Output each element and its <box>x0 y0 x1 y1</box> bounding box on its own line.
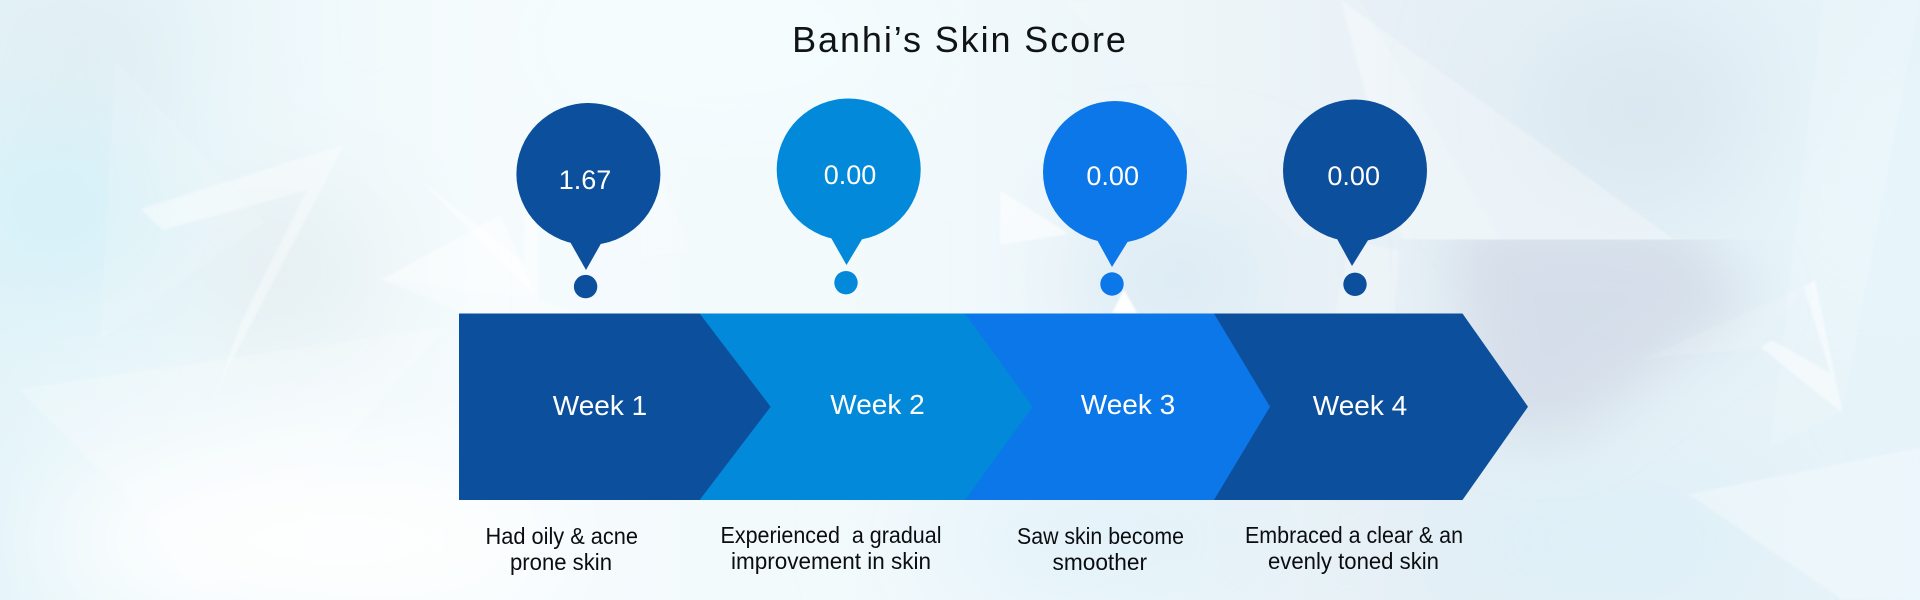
score bubble: week 3 <box>1043 101 1187 296</box>
score bubble: week 1 <box>516 103 660 298</box>
caption: week 2: Experienced a gradual <box>720 522 942 548</box>
week 3 chevron <box>960 314 1270 500</box>
week 4 chevron: Week 4 <box>1313 390 1407 421</box>
score bubble: week 4: 0.00 <box>1327 161 1380 191</box>
caption: week 1 <box>486 523 638 575</box>
week 4 chevron <box>1170 314 1528 500</box>
caption: week 4: evenly toned skin <box>1268 548 1439 574</box>
week 2 chevron: Week 2 <box>830 389 925 420</box>
caption: week 1: Had oily & acne <box>486 523 638 549</box>
week 1 chevron <box>459 314 771 500</box>
score bubble: week 2 <box>777 98 921 294</box>
score bubble: week 3: 0.00 <box>1086 161 1139 191</box>
caption: week 4: Embraced a clear & an <box>1245 522 1463 548</box>
caption: week 3: Saw skin become <box>1017 523 1184 549</box>
caption: week 2: improvement in skin <box>731 548 931 574</box>
week 2 chevron <box>695 314 1033 500</box>
week 1 chevron: Week 1 <box>553 390 647 421</box>
title: Banhi’s Skin Score <box>792 19 1128 60</box>
week 3 chevron: Week 3 <box>1081 389 1175 420</box>
caption: week 3 <box>1017 523 1184 575</box>
timeline arrow bar <box>459 314 1528 500</box>
caption: week 2 <box>720 522 942 574</box>
caption: week 1: prone skin <box>510 549 612 575</box>
caption: week 3: smoother <box>1052 549 1147 575</box>
score bubble: week 4 <box>1283 100 1427 296</box>
caption: week 4 <box>1245 522 1463 574</box>
score bubble: week 2: 0.00 <box>824 160 876 190</box>
score bubble: week 1: 1.67 <box>559 165 611 195</box>
